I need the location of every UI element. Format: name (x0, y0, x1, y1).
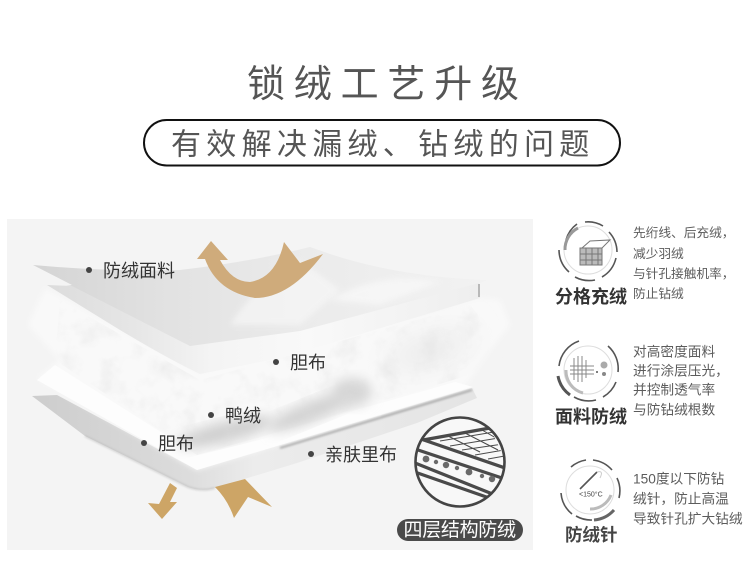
icon: fabric weave (558, 341, 618, 401)
panel: four-layer structure (7, 219, 533, 550)
feature: 分格充绒 (555, 222, 734, 307)
label: 胆布 upper: 胆布 (290, 353, 326, 373)
feature: 面料防绒 (555, 341, 729, 427)
layer: down filling (28, 288, 510, 470)
layer: top fabric (33, 247, 487, 348)
heading: 分格充绒 (555, 286, 627, 307)
heading: 面料防绒 (555, 406, 627, 427)
icon: needle (561, 460, 620, 520)
description: 先绗线、后充绒， (633, 225, 734, 240)
arrow: bottom down (148, 483, 177, 519)
label: 胆布 upper (273, 353, 326, 373)
description (633, 472, 743, 526)
arrow: bottom up (215, 479, 272, 518)
heading: 防绒针 (565, 525, 618, 545)
feature: 防绒针 (561, 460, 743, 545)
icon: needle: <150°C (579, 490, 603, 498)
structure diagram circle (410, 418, 510, 506)
description: 对高密度面料 (633, 344, 715, 360)
description: 并控制透气率 (633, 382, 715, 398)
description: 与防钻绒根数 (633, 402, 715, 418)
description: 防止钻绒 (633, 286, 684, 301)
description (633, 344, 729, 418)
description: 导致针孔扩大钻绒 (633, 512, 743, 526)
description: 与针孔接触机率， (633, 266, 734, 281)
title: 锁绒工艺升级 (247, 64, 528, 106)
label: 鸭绒: 鸭绒 (225, 406, 261, 426)
layer: upper liner band (47, 283, 480, 374)
label: 亲肤里布: 亲肤里布 (325, 445, 397, 465)
label: 胆布 lower: 胆布 (158, 434, 194, 454)
description: 进行涂层压光， (633, 364, 729, 378)
description (633, 225, 734, 301)
icon: grid quilting (559, 222, 617, 281)
subtitle pill: 有效解决漏绒、钻绒的问题 (171, 128, 595, 162)
layer: bottom lining (32, 388, 477, 490)
arrow: top curved (197, 241, 323, 298)
label: 防绒面料: 防绒面料 (103, 261, 175, 281)
badge: 四层结构防绒: 四层结构防绒 (404, 519, 516, 541)
description: 150度以下防钻 (633, 472, 725, 486)
description: 绒针，防止高温 (633, 490, 729, 506)
label: 鸭绒 (208, 406, 261, 426)
label: 胆布 lower (141, 434, 194, 454)
description: 减少羽绒 (633, 247, 684, 261)
subtitle pill (144, 120, 620, 166)
